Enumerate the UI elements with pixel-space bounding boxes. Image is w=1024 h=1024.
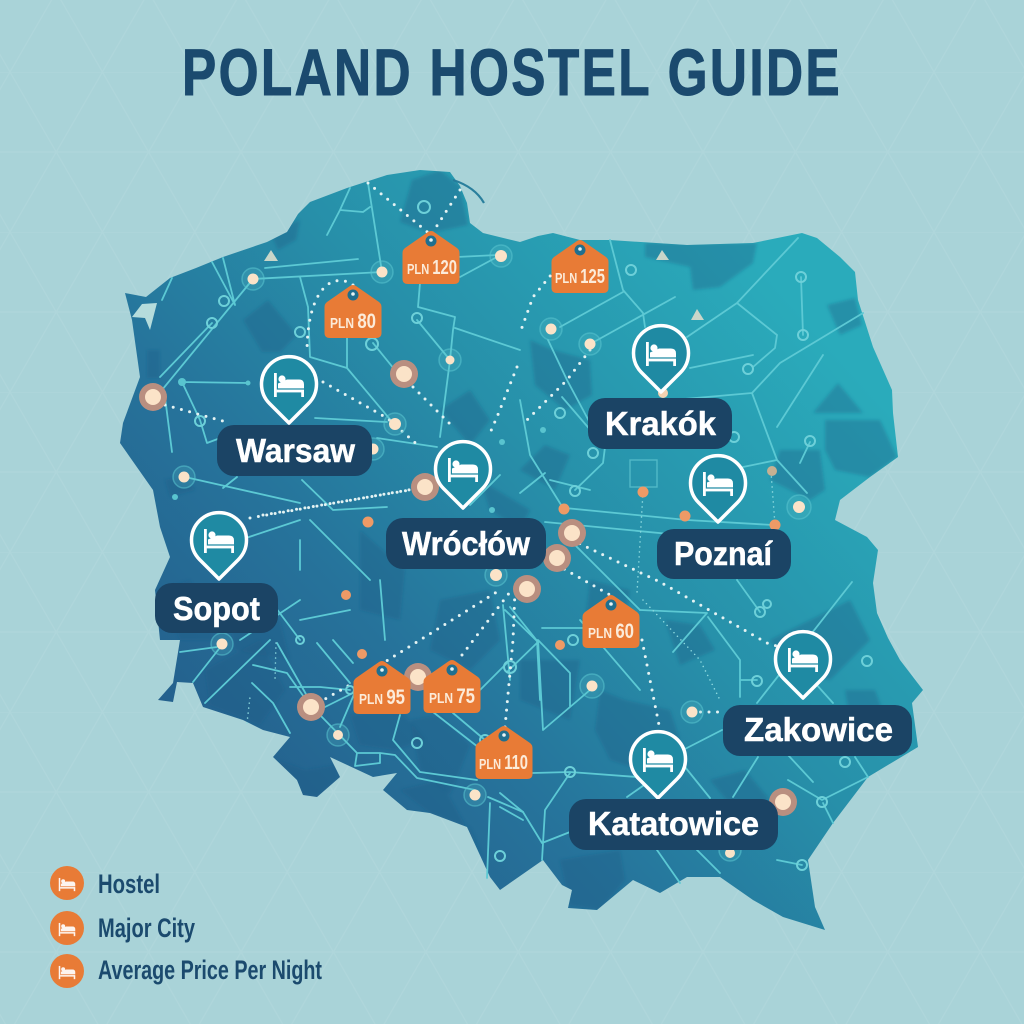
city label: Krakók bbox=[588, 398, 732, 449]
price tag: PLN 110 bbox=[476, 726, 532, 779]
hostel pin: Krakók bbox=[634, 326, 688, 392]
legend item: Average Price Per Night bbox=[50, 954, 322, 988]
city label: Sopot bbox=[155, 583, 278, 633]
price tag: PLN 60 bbox=[582, 595, 640, 648]
Hel peninsula bbox=[453, 180, 484, 203]
triangle markers bbox=[264, 250, 704, 320]
hostel pin: Zakowice bbox=[776, 632, 830, 698]
legend bbox=[50, 866, 322, 988]
city label: Sopot: Sopot bbox=[173, 590, 260, 627]
city label: Katatowice: Katatowice bbox=[588, 805, 759, 842]
city label: Zakowice bbox=[723, 705, 912, 756]
lagoon inset bbox=[132, 303, 157, 330]
hostel pin: Sopot bbox=[192, 513, 246, 579]
city label: Zakowice: Zakowice bbox=[744, 711, 893, 748]
dotted routes bbox=[165, 183, 790, 730]
hostel pin: Poznaí bbox=[690, 456, 746, 522]
city label: Poznaí: Poznaí bbox=[674, 535, 774, 572]
city label: Wrócłów bbox=[386, 518, 546, 569]
city label: Katatowice bbox=[569, 799, 778, 850]
city label: Warsaw: Warsaw bbox=[236, 432, 355, 469]
legend item: Major City: Major City bbox=[98, 913, 195, 943]
price tag: PLN 120: PLN 120 bbox=[407, 257, 457, 279]
price tag: PLN 95 bbox=[354, 661, 410, 714]
legend item: Major City bbox=[50, 911, 195, 945]
price tag: PLN 125 bbox=[552, 240, 608, 293]
price tag: PLN 120 bbox=[402, 231, 460, 284]
title: POLAND HOSTEL GUIDE bbox=[182, 35, 842, 109]
orange minor nodes bbox=[341, 388, 780, 659]
map of Poland bbox=[120, 170, 923, 930]
hostel pin: Katatowice bbox=[630, 732, 686, 798]
hostel pin: Warsaw bbox=[262, 357, 316, 423]
legend item: Average Price Per Night: Average Price Per Night bbox=[98, 955, 322, 985]
price tag: PLN 80 bbox=[324, 285, 382, 338]
outline rings bbox=[195, 201, 872, 870]
price tag: PLN 95: PLN 95 bbox=[359, 686, 405, 709]
price tag: PLN 75 bbox=[424, 660, 480, 713]
price tag: PLN 125: PLN 125 bbox=[555, 266, 605, 288]
city label: Poznaí bbox=[657, 529, 791, 579]
price tag: PLN 60: PLN 60 bbox=[588, 620, 634, 643]
hostel pin: Wrocław bbox=[436, 442, 490, 508]
major city markers bbox=[139, 360, 797, 816]
square marker bbox=[630, 460, 657, 487]
road network bbox=[160, 183, 868, 883]
price tag: PLN 75: PLN 75 bbox=[429, 685, 475, 708]
city label: Krakók: Krakók bbox=[605, 405, 717, 442]
price tag: PLN 110: PLN 110 bbox=[479, 752, 528, 774]
darker terrain regions bbox=[147, 170, 897, 910]
legend item: Hostel bbox=[50, 866, 160, 900]
legend item: Hostel: Hostel bbox=[98, 869, 160, 899]
price tag: PLN 80: PLN 80 bbox=[330, 310, 376, 333]
city label: Warsaw bbox=[217, 425, 372, 476]
map outline bbox=[120, 170, 923, 930]
small hostel nodes bbox=[172, 245, 811, 861]
city label: Wrócłów: Wrócłów bbox=[402, 525, 530, 562]
